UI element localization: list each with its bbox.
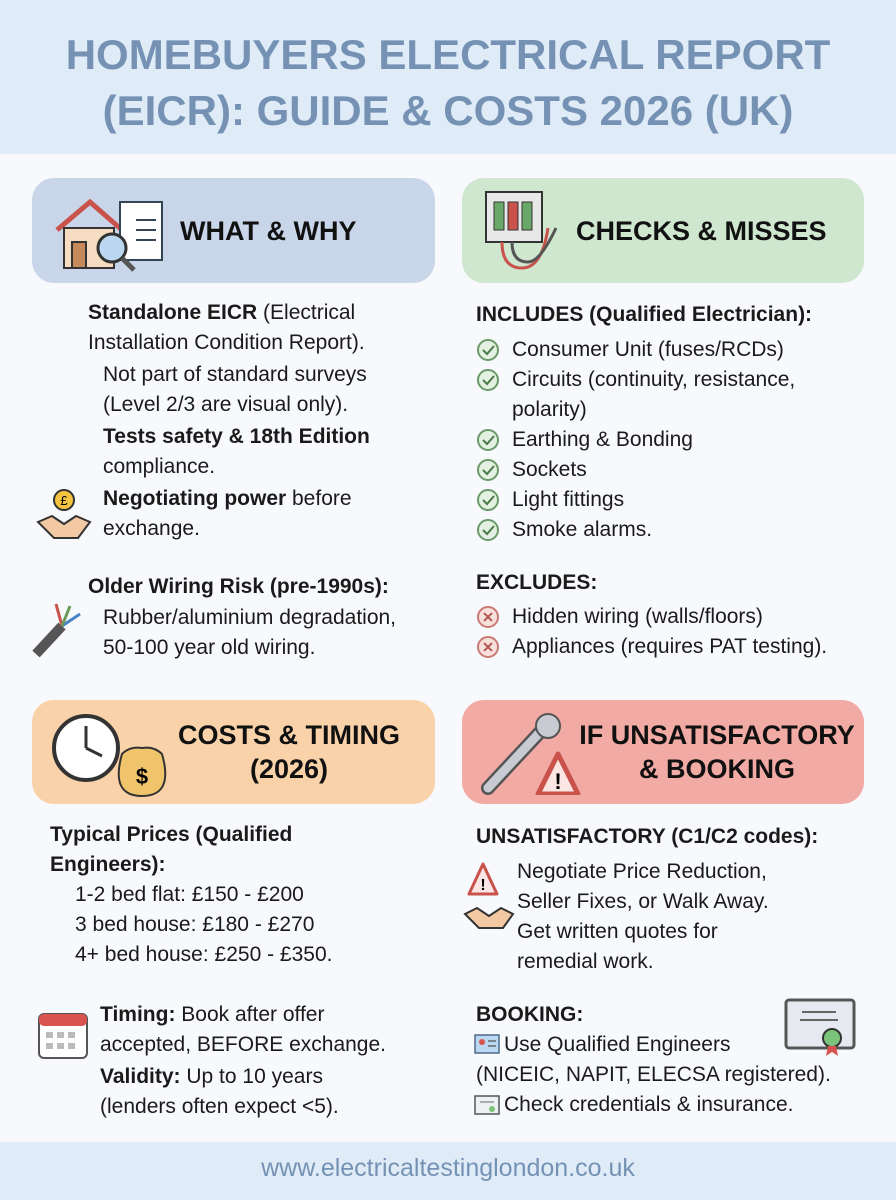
panel: if unsatisfactory & booking: Negotiate Price Reduction, — [517, 860, 767, 883]
title: (EICR): GUIDE & COSTS 2026 (UK) — [103, 87, 793, 134]
icons: crosses — [477, 606, 499, 658]
icon: id card — [474, 1034, 500, 1054]
icon: warning + handshake — [463, 862, 514, 929]
footer url: www.electricaltestinglondon.co.uk — [261, 1154, 635, 1182]
timing text — [100, 1003, 386, 1056]
timing text: accepted, BEFORE exchange. — [100, 1033, 386, 1056]
heading text: CHECKS & MISSES — [576, 216, 827, 246]
panel: if unsatisfactory & booking — [462, 700, 864, 1116]
timing text: Timing: Book after offer — [100, 1003, 324, 1026]
includes list: Earthing & Bonding — [512, 428, 693, 451]
icon: certificate — [784, 998, 856, 1056]
icon: wrench and warning — [481, 713, 580, 795]
prices text: Engineers): — [50, 853, 166, 876]
text block: Installation Condition Report). — [88, 331, 365, 354]
panel: if unsatisfactory & booking: Use Qualified Engineers — [504, 1033, 730, 1056]
panel: if unsatisfactory & booking: remedial work. — [517, 950, 654, 973]
panel: what & why: compliance. — [103, 455, 215, 478]
panel: costs & timing: (lenders often expect <5). — [100, 1095, 339, 1118]
icon: cable — [32, 604, 81, 658]
panel: costs & timing: Validity: Up to 10 years — [100, 1065, 323, 1088]
panel: what & why: exchange. — [103, 517, 200, 540]
includes list — [476, 303, 812, 541]
icon: wrench and warning: ! — [554, 769, 562, 794]
excludes list: EXCLUDES: — [476, 571, 597, 594]
panel: costs & timing: 4+ bed house: £250 - £350. — [75, 943, 332, 966]
heading text: COSTS & TIMING — [178, 720, 400, 750]
excludes list: Hidden wiring (walls/floors) — [512, 605, 763, 628]
heading: costs & timing — [32, 700, 435, 804]
includes list: Sockets — [512, 458, 587, 481]
icon: house with clipboard — [55, 198, 163, 272]
heading: what & why — [32, 178, 435, 283]
heading text — [579, 720, 855, 784]
excludes list — [476, 571, 827, 658]
heading: if unsatisfactory — [462, 700, 864, 804]
icon: handshake with pound: £ — [60, 493, 68, 508]
heading text: IF UNSATISFACTORY — [579, 720, 855, 750]
includes list: Light fittings — [512, 488, 624, 511]
panel: what & why: (Level 2/3 are visual only). — [103, 393, 348, 416]
panel: if unsatisfactory & booking: Get written quotes for — [517, 920, 718, 943]
icons: checks — [477, 339, 499, 541]
includes list: Consumer Unit (fuses/RCDs) — [512, 338, 784, 361]
panel: what & why: Tests safety & 18th Edition — [103, 425, 370, 448]
panel: what & why — [32, 178, 435, 659]
footer band — [0, 1142, 896, 1200]
text block: Standalone EICR (Electrical — [88, 301, 355, 324]
panel: costs & timing: 3 bed house: £180 - £270 — [75, 913, 314, 936]
panel: costs & timing — [32, 700, 435, 1118]
unsatisfactory text: UNSATISFACTORY (C1/C2 codes): — [476, 825, 818, 848]
includes list: Smoke alarms. — [512, 518, 652, 541]
heading text: & BOOKING — [639, 754, 795, 784]
heading text: (2026) — [250, 754, 328, 784]
heading: checks & misses — [462, 178, 864, 283]
icon: consumer unit — [485, 191, 558, 270]
panel: if unsatisfactory & booking: (NICEIC, NAPIT, ELECSA registered). — [476, 1063, 831, 1086]
includes list: INCLUDES (Qualified Electrician): — [476, 303, 812, 326]
header band — [0, 0, 896, 154]
includes list: polarity) — [512, 398, 587, 421]
text block — [88, 301, 365, 354]
panel: what & why: Negotiating power before — [103, 487, 352, 510]
icon: clock and money bag — [52, 714, 166, 797]
includes list: Circuits (continuity, resistance, — [512, 368, 795, 391]
panel: what & why: Not part of standard surveys — [103, 363, 367, 386]
panel: what & why: Older Wiring Risk (pre-1990s): — [88, 575, 389, 598]
icon: handshake with pound — [36, 489, 92, 539]
booking text: BOOKING: — [476, 1003, 583, 1026]
heading text — [178, 720, 400, 784]
prices text: Typical Prices (Qualified — [50, 823, 292, 846]
excludes list: Appliances (requires PAT testing). — [512, 635, 827, 658]
panel: if unsatisfactory & booking: Check credentials & insurance. — [504, 1093, 793, 1116]
title — [66, 31, 830, 134]
icon: small certificate — [474, 1095, 500, 1115]
heading text: WHAT & WHY — [180, 216, 356, 246]
icon: calendar — [38, 1013, 88, 1059]
title: HOMEBUYERS ELECTRICAL REPORT — [66, 31, 830, 78]
panel: if unsatisfactory & booking: Seller Fixes, or Walk Away. — [517, 890, 769, 913]
panel: what & why: 50-100 year old wiring. — [103, 636, 315, 659]
prices text — [50, 823, 292, 876]
panel: checks & misses — [462, 178, 864, 658]
panel: costs & timing: 1-2 bed flat: £150 - £200 — [75, 883, 304, 906]
icon: warning + handshake: ! — [480, 877, 486, 894]
icon: clock and money bag: $ — [136, 764, 148, 789]
panel: what & why: Rubber/aluminium degradation, — [103, 606, 396, 629]
